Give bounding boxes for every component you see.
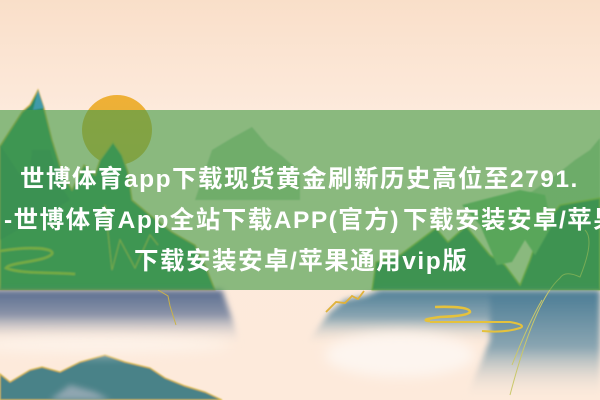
- title: 世博体育app下载现货黄金刷新历史高位至2791.: [20, 166, 579, 193]
- foggy blue band right: [305, 290, 600, 400]
- top ridge of blue hills: [326, 291, 364, 312]
- far pale mountains: [195, 127, 600, 210]
- title: 下载安装安卓/苹果通用vip版: [134, 248, 468, 275]
- lower blue mountain: [0, 355, 222, 400]
- translucent green title band: [0, 110, 600, 290]
- mist: [0, 333, 475, 377]
- foggy blue band left: [0, 290, 240, 345]
- right green mountains: [372, 190, 600, 290]
- sun: [82, 95, 152, 165]
- river lines right: [426, 230, 589, 395]
- mountain gold ridge: [158, 290, 176, 325]
- left green mountains: [0, 90, 215, 290]
